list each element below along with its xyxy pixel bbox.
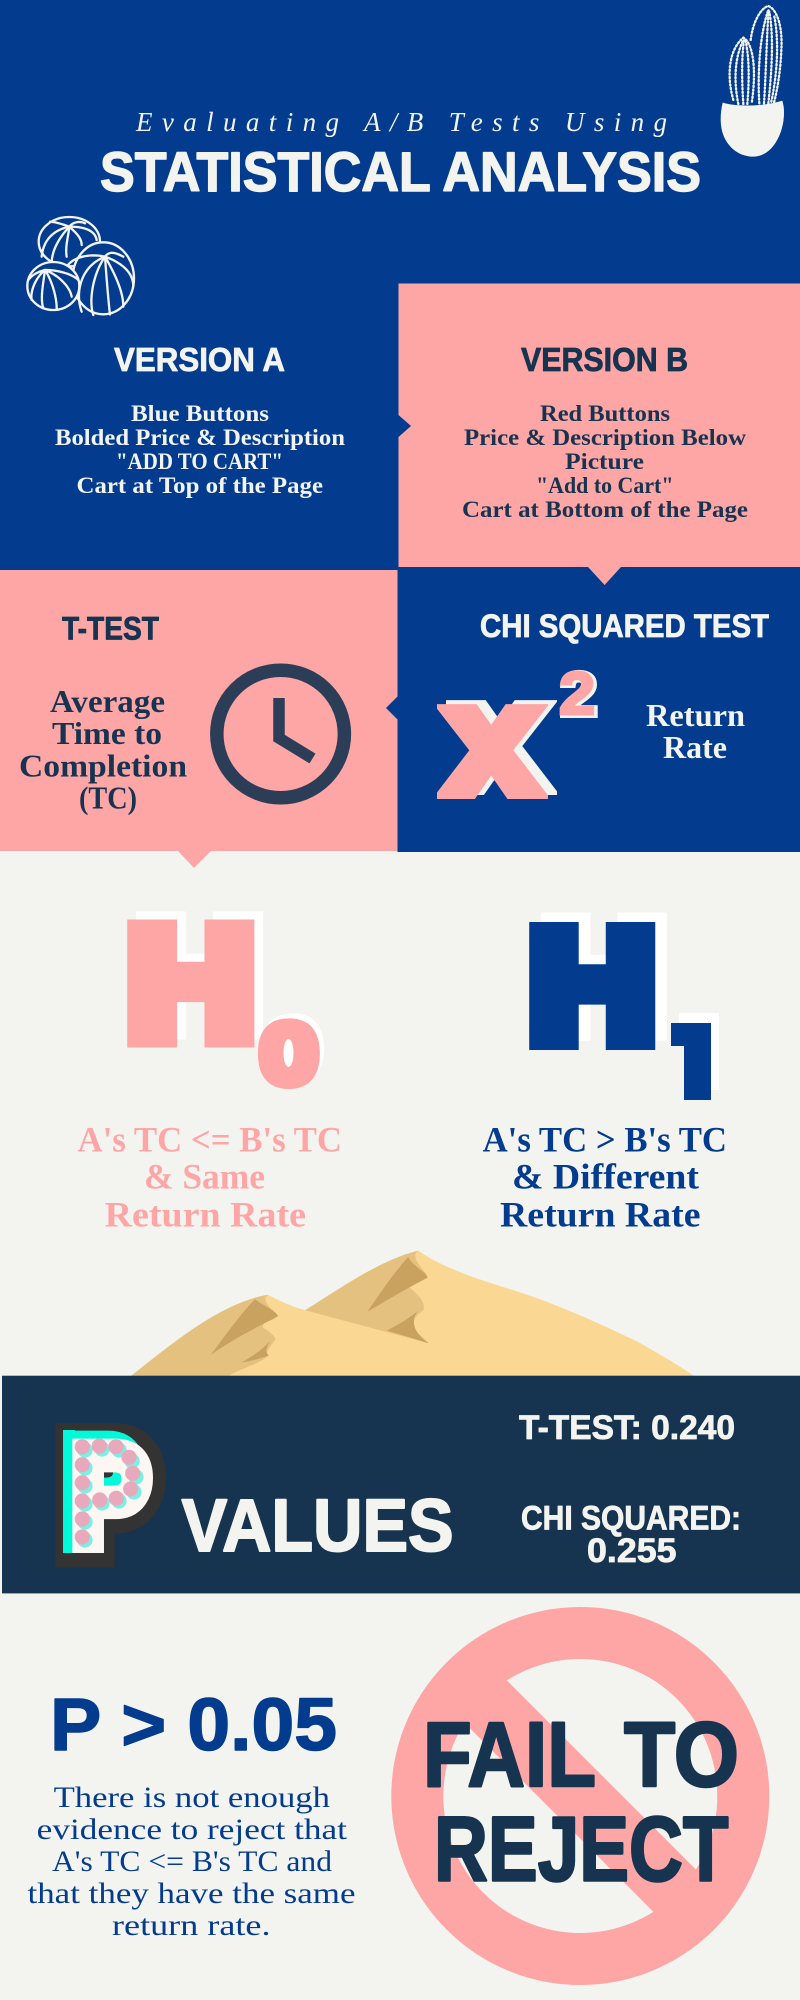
heading: fail to reject: REJECT xyxy=(434,1798,728,1900)
heading: t-test: T-TEST xyxy=(62,610,159,646)
main heading: STATISTICAL ANALYSIS xyxy=(100,140,701,203)
symbol: H1: H xyxy=(530,900,655,1072)
list: version A features: Blue Buttons xyxy=(131,401,269,426)
pot xyxy=(721,101,784,157)
explanation paragraph: that they have the same xyxy=(28,1877,356,1910)
icon: letter P with dots: P xyxy=(64,1411,142,1566)
subtitle: Evaluating A/B Tests Using xyxy=(135,107,667,137)
text: average time to completion: Average xyxy=(50,683,165,719)
hypothesis H0 xyxy=(78,889,342,1234)
symbol: H0 xyxy=(128,889,319,1098)
symbol: H0: H xyxy=(137,889,262,1061)
icon: letter P with dots: P xyxy=(68,1417,149,1573)
icon: chi squared symbol xyxy=(437,670,598,799)
explanation paragraph: There is not enough xyxy=(54,1781,330,1814)
conclusion text xyxy=(28,1683,356,1942)
text: null hypothesis: & Same xyxy=(144,1157,265,1197)
symbol: H1: H xyxy=(542,890,666,1063)
panel: version A xyxy=(55,341,345,498)
text: average time to completion xyxy=(19,683,187,816)
hypothesis H1 xyxy=(482,912,724,1227)
icon: chi squared symbol: x xyxy=(446,654,537,825)
text: average time to completion: Time to xyxy=(52,715,162,751)
value: chi squared: CHI SQUARED: xyxy=(521,1499,741,1537)
symbol: H0: H xyxy=(128,897,254,1069)
text: null hypothesis: A's TC <= B's TC xyxy=(78,1120,342,1160)
panel: chi squared test xyxy=(386,567,800,852)
explanation paragraph: evidence to reject that xyxy=(37,1813,348,1846)
list: version A features: Bolded Price & Description xyxy=(55,425,345,450)
heading: version A: VERSION A xyxy=(114,341,285,378)
panel: t-test xyxy=(0,570,398,868)
icon: clock xyxy=(217,670,344,798)
symbol: H1: 1 xyxy=(673,991,734,1114)
icon: round cacti xyxy=(27,217,134,315)
text: null hypothesis xyxy=(78,1120,342,1234)
arrow: pointing down xyxy=(588,567,621,585)
heading: version B: VERSION B xyxy=(521,341,688,378)
text: average time to completion: Completion xyxy=(19,748,187,784)
list: version A features xyxy=(55,401,345,498)
value: chi squared: 0.255 xyxy=(587,1532,676,1570)
text: return rate: Return xyxy=(646,697,745,733)
panel: header background xyxy=(0,0,800,570)
value: chi squared xyxy=(521,1499,741,1570)
icon: prohibition sign xyxy=(417,1633,743,1959)
text: null hypothesis: Return Rate xyxy=(105,1194,306,1234)
text: alternative hypothesis: A's TC > B's TC xyxy=(483,1120,727,1160)
heading: chi squared test: CHI SQUARED TEST xyxy=(480,608,769,644)
arrow: pointing right xyxy=(398,415,411,437)
title xyxy=(100,107,701,203)
text: average time to completion: (TC) xyxy=(79,780,137,816)
symbol: H1 xyxy=(529,912,719,1100)
heading: p greater than 0.05: P > 0.05 xyxy=(50,1683,337,1766)
fail to reject badge xyxy=(417,1633,743,1959)
arrow: pointing down xyxy=(178,851,211,868)
panel: p values xyxy=(2,1376,800,1593)
list: version B features: Picture xyxy=(565,449,644,474)
list: version B features: "Add to Cart" xyxy=(536,473,674,498)
illustration: sand dunes xyxy=(130,1251,695,1377)
symbol: H1: 1 xyxy=(665,1001,726,1124)
explanation paragraph: A's TC <= B's TC and xyxy=(52,1845,332,1878)
list: version B features xyxy=(462,401,748,522)
arrow: pointing left xyxy=(386,696,398,720)
text: alternative hypothesis xyxy=(483,1120,727,1234)
panel: version B xyxy=(398,284,800,585)
text: alternative hypothesis: Return Rate xyxy=(500,1194,701,1234)
heading: fail to reject: FAIL xyxy=(423,1704,596,1806)
icon: chi squared symbol: 2 xyxy=(559,660,595,727)
list: version B features: Price & Description Below xyxy=(464,425,746,450)
text: return rate xyxy=(646,697,745,765)
symbol: H0: 0 xyxy=(266,1003,319,1093)
heading: fail to reject xyxy=(423,1704,739,1900)
heading: fail to reject: TO xyxy=(624,1704,739,1806)
value: t-test: T-TEST: 0.240 xyxy=(519,1409,735,1447)
text: alternative hypothesis: & Different xyxy=(512,1157,699,1197)
list: version A features: Cart at Top of the Page xyxy=(76,473,323,498)
icon: chi squared symbol: 2 xyxy=(561,661,597,728)
heading: values: VALUES xyxy=(182,1484,454,1567)
list: version B features: Red Buttons xyxy=(540,401,670,426)
list: version B features: Cart at Bottom of the Page xyxy=(462,497,748,522)
explanation paragraph: return rate. xyxy=(112,1909,270,1942)
text: return rate: Rate xyxy=(663,729,727,765)
list: version A features: "ADD TO CART" xyxy=(116,449,283,474)
icon: potted cactus xyxy=(721,6,784,157)
explanation paragraph xyxy=(28,1781,356,1942)
icon: letter P with dots: P xyxy=(72,1419,150,1574)
symbol: H0: 0 xyxy=(262,1008,315,1098)
icon: chi squared symbol: x xyxy=(454,650,546,821)
